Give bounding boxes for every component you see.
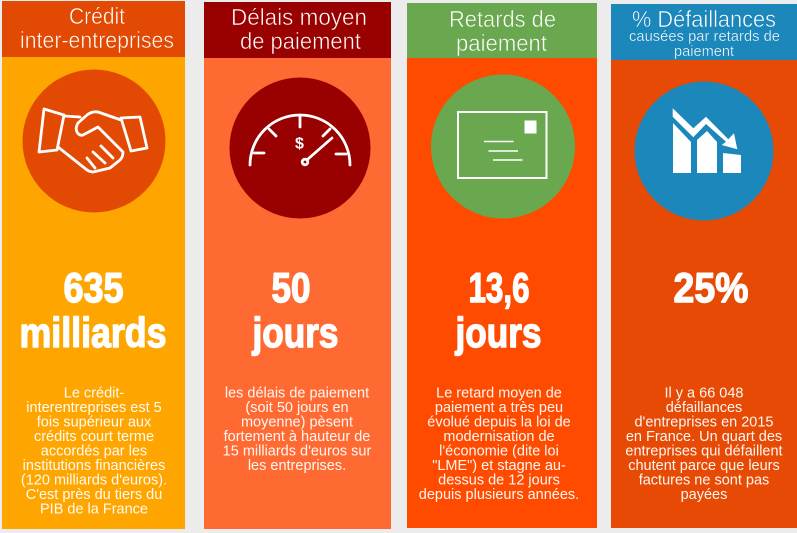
panel: délais moyen de paiement [204, 2, 391, 529]
description: crédit inter-entreprises [21, 386, 167, 518]
panel: crédit inter-entreprises [2, 1, 185, 529]
description: retard moyen: "LME") et stagne au- [432, 458, 566, 474]
big number: 50 jours [252, 264, 338, 356]
big number: 25%: 25% [674, 264, 748, 311]
header band: délais moyen de paiement: Délais moyen [231, 4, 367, 30]
icon: falling bar chart [634, 82, 774, 220]
description: délais de paiement: les délais de paiement [225, 386, 369, 402]
big number: 50 jours: jours [252, 309, 338, 356]
big number: 13,6 jours [455, 264, 542, 356]
description: crédit inter-entreprises: crédits court terme [34, 429, 154, 445]
description: défaillances: Il y a 66 048 [664, 386, 744, 402]
description: retard moyen: depuis plusieurs années. [419, 487, 579, 503]
description: retard moyen [419, 386, 579, 503]
description: crédit inter-entreprises: accordés par les [41, 444, 147, 460]
description: crédit inter-entreprises: fois supérieur aux [37, 414, 152, 430]
header band: crédit inter-entreprises: Crédit [69, 3, 125, 29]
description: délais de paiement: fortement à hauteur de [224, 429, 370, 445]
big number: 13,6 jours: jours [455, 309, 542, 356]
description: retard moyen: l'économie (dite loi [439, 444, 559, 460]
description: retard moyen: modernisation de [443, 429, 555, 445]
description: défaillances: chutent parce que leurs [628, 458, 780, 474]
header band: défaillances: % Défaillances [632, 6, 776, 32]
icon: speedometer: $ [295, 136, 304, 152]
header band: crédit inter-entreprises: inter-entreprises [20, 27, 174, 53]
header band: délais moyen de paiement: de paiement [240, 28, 361, 54]
description: délais de paiement: (soit 50 jours en [245, 400, 349, 416]
header band: défaillances: paiement [674, 44, 734, 60]
description: crédit inter-entreprises: PIB de la France [40, 502, 148, 518]
description: crédit inter-entreprises: C'est près du tiers du [26, 487, 162, 503]
description: retard moyen: dessus de 12 jours [438, 472, 560, 488]
description: défaillances: factures ne sont pas [639, 472, 769, 488]
panel: défaillances [611, 4, 797, 528]
description: délais de paiement: 15 milliards d'euros sur [223, 444, 371, 460]
description: défaillances: entreprises qui défaillent [625, 444, 783, 460]
description: retard moyen: Le retard moyen de [436, 386, 562, 402]
panel: retards de paiement [407, 3, 597, 528]
description: défaillances: en France. Un quart des [626, 429, 782, 445]
description: défaillances: payées [681, 487, 727, 503]
description: délais de paiement [223, 386, 371, 474]
header band: retards de paiement: paiement [456, 30, 547, 56]
description: crédit inter-entreprises: Le crédit- [64, 386, 124, 402]
description: délais de paiement: moyenne) pèsent [241, 414, 353, 430]
big number: 13,6 jours: 13,6 [468, 264, 530, 311]
description: délais de paiement: les entreprises. [248, 458, 346, 474]
description: retard moyen: évolué depuis la loi de [427, 414, 571, 430]
big number: 635 milliards [20, 264, 166, 356]
icon: handshake [22, 70, 166, 212]
description: défaillances [625, 386, 783, 503]
description: crédit inter-entreprises: (120 milliards d'euros). [21, 472, 167, 488]
header band: crédit inter-entreprises [2, 1, 185, 57]
big number: 635 milliards: 635 [64, 264, 124, 311]
icon: speedometer [230, 78, 370, 218]
description: crédit inter-entreprises: institutions financières [23, 458, 165, 474]
header band: délais moyen de paiement [204, 2, 391, 58]
description: crédit inter-entreprises: interentreprises est 5 [26, 400, 162, 416]
description: défaillances: d'entreprises en 2015 [634, 414, 774, 430]
description: retard moyen: paiement a très peu [435, 400, 563, 416]
icon: envelope [431, 74, 575, 218]
big number: 50 jours: 50 [272, 264, 310, 311]
header band: défaillances: causées par retards de [629, 29, 780, 45]
description: défaillances: défaillances [666, 400, 742, 416]
header band: défaillances [611, 4, 797, 60]
big number: 635 milliards: milliards [20, 309, 166, 356]
header band: retards de paiement: Retards de [449, 6, 556, 32]
header band: retards de paiement [407, 3, 597, 58]
